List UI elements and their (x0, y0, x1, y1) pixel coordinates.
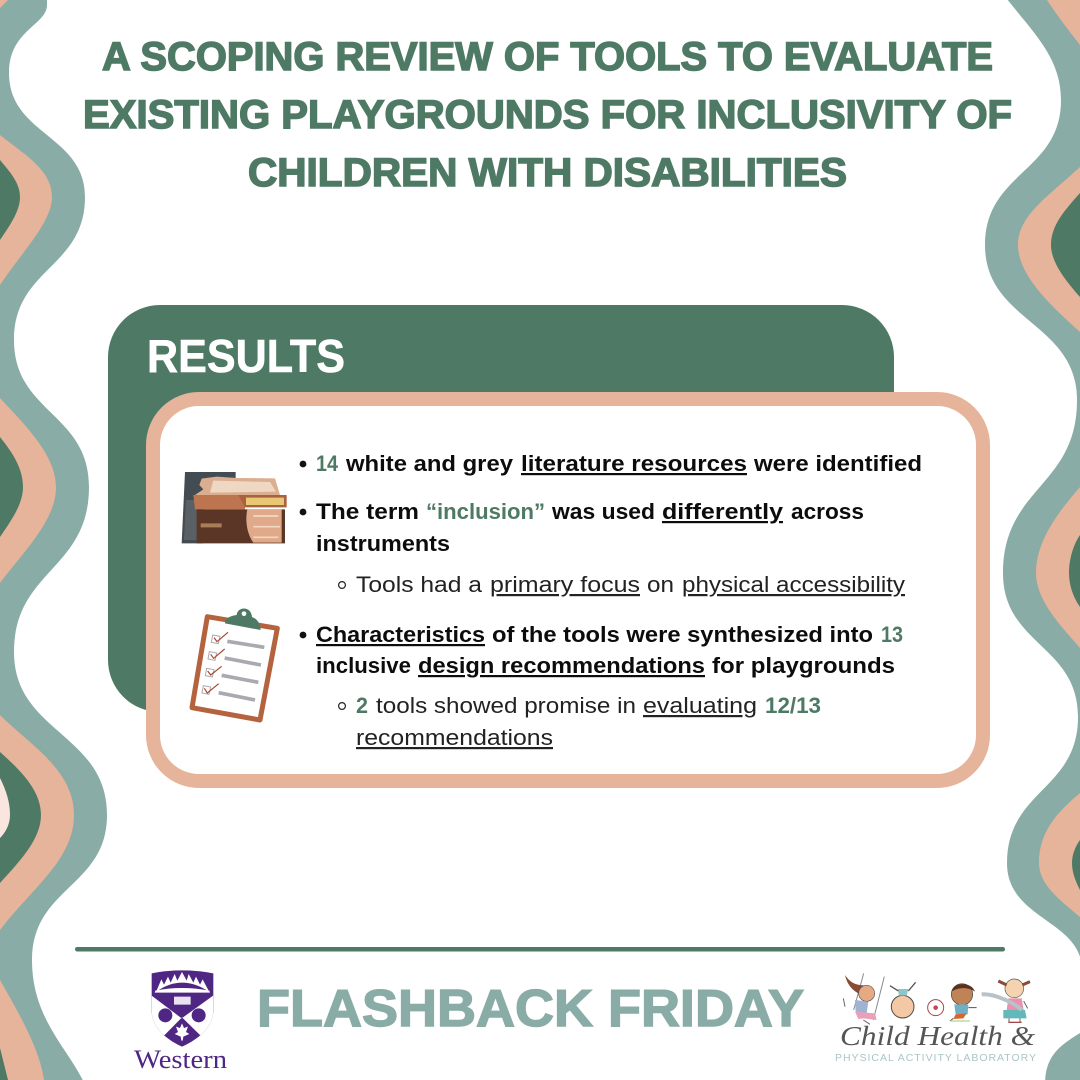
bullet: literature resources (300, 451, 922, 476)
children illustration (843, 973, 1030, 1024)
bullet: characteristics: Characteristics (316, 622, 485, 647)
bullet: term inclusion: differently (662, 499, 784, 524)
bullet: literature resources: white and grey (345, 451, 514, 476)
sub-bullet: physical accessibility: primary focus (490, 572, 640, 597)
wordmark: Western (134, 1045, 227, 1074)
bullet: term inclusion: was used (551, 499, 655, 524)
bullet: characteristics (300, 622, 903, 678)
bullet: characteristics: design recommendations (418, 653, 705, 678)
title (83, 35, 1012, 195)
sub-bullet: two tools: tools showed promise in (376, 693, 636, 718)
bullet: characteristics: 13 (881, 622, 903, 647)
heading: results: RESULTS (147, 330, 345, 382)
right wave decoration (980, 0, 1080, 1080)
shield (150, 970, 215, 1047)
sub-bullet: physical accessibility: Tools had a (356, 572, 483, 597)
sub-bullet: two tools: recommendations (356, 725, 553, 750)
panel: results header card (108, 305, 894, 712)
bullet: literature resources: were identified (753, 451, 922, 476)
left wave decoration (0, 0, 107, 1080)
bullet: characteristics: of the tools were synthesized into (492, 622, 873, 647)
title: CHILDREN WITH DISABILITIES (248, 151, 847, 195)
bullet: literature resources: literature resources (521, 451, 747, 476)
logo: Western University (134, 970, 227, 1074)
sub-bullet: physical accessibility (339, 572, 905, 597)
sub-bullet: two tools: 12/13 (765, 693, 821, 718)
script wordmark: Child Health & (840, 1021, 1035, 1051)
sub-bullet: two tools: 2 (356, 693, 368, 718)
bullet list: results text (300, 451, 922, 750)
lab name: PHYSICAL ACTIVITY LABORATORY (835, 1052, 1036, 1064)
sub-bullet: physical accessibility: on (647, 572, 674, 597)
title: A SCOPING REVIEW OF TOOLS TO EVALUATE (102, 35, 993, 79)
bullet: term inclusion: The term (316, 499, 419, 524)
footer heading: flashback friday: FLASHBACK FRIDAY (257, 980, 804, 1038)
bullet: characteristics: for playgrounds (712, 653, 895, 678)
footer divider (75, 947, 1005, 952)
icon: clipboard checklist (192, 608, 277, 720)
sub-bullet: two tools: evaluating (643, 693, 757, 718)
sub-bullet: two tools (339, 693, 821, 750)
bullet: term inclusion: “inclusion” (426, 499, 545, 524)
bullet: term inclusion: instruments (316, 531, 450, 556)
title: EXISTING PLAYGROUNDS FOR INCLUSIVITY OF (83, 93, 1012, 137)
bullet: characteristics: inclusive (316, 653, 411, 678)
bullet: term inclusion: across (791, 499, 864, 524)
icon: stack of books (182, 472, 287, 543)
logo: Child Health and Physical Activity Laboratory (835, 973, 1036, 1064)
panel: results content card (153, 399, 983, 781)
bullet: literature resources: 14 (316, 451, 339, 476)
sub-bullet: physical accessibility: physical accessibility (682, 572, 905, 597)
bullet: term inclusion (300, 499, 864, 556)
